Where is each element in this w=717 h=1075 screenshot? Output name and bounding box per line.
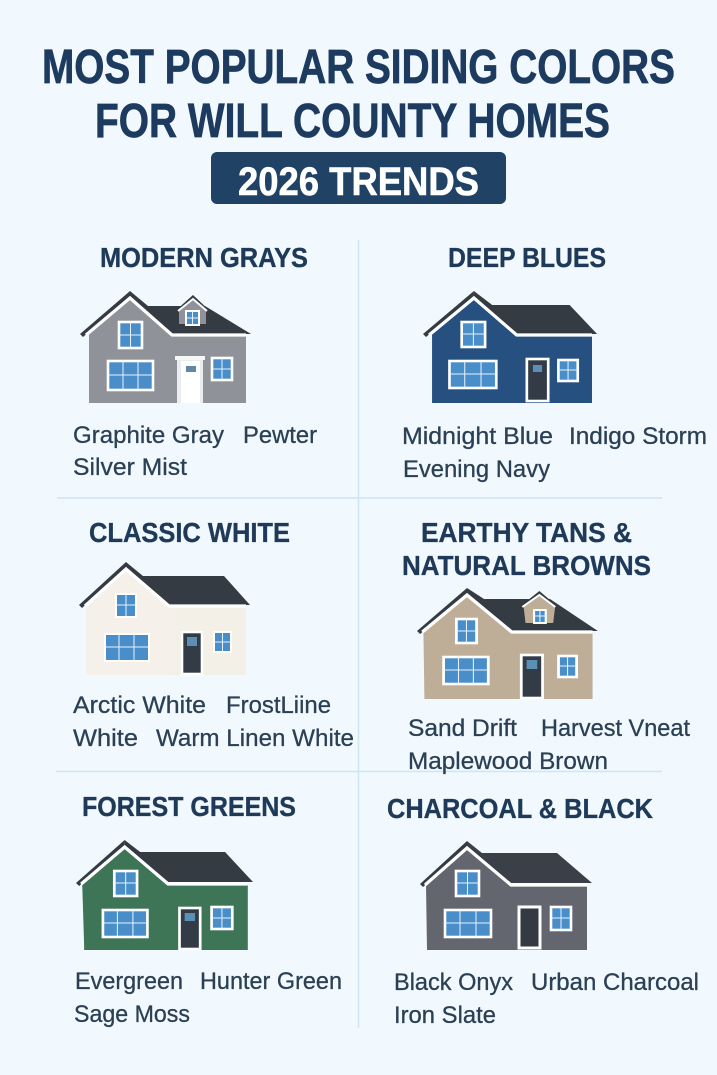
color names: forest greens: Evergreen: [75, 968, 183, 995]
color names: classic white: [73, 692, 354, 752]
panel: classic white: [73, 517, 354, 752]
heading: deep blues: DEEP BLUES: [448, 242, 606, 273]
color names: classic white: Warm Linen White: [156, 725, 354, 752]
color names: deep blues: Midnight Blue: [402, 423, 553, 450]
color names: classic white: White: [73, 725, 138, 752]
panel: charcoal and black: [387, 793, 699, 1029]
title: [42, 41, 675, 148]
color names: deep blues: Indigo Storm: [569, 423, 707, 450]
icon: gray house: [80, 291, 251, 403]
color names: charcoal and black: Urban Charcoal: [531, 969, 699, 996]
icon: blue house: [423, 291, 597, 403]
icon: tan house: [417, 588, 598, 699]
color names: classic white: FrostLiine: [226, 692, 331, 719]
panel: modern grays: [73, 242, 317, 481]
icon: green house: [76, 840, 253, 950]
heading: earthy tans and natural browns: NATURAL BROWNS: [402, 550, 651, 581]
color names: charcoal and black: [394, 969, 699, 1029]
color names: forest greens: Hunter Green: [200, 968, 342, 995]
color names: charcoal and black: Black Onyx: [394, 969, 513, 996]
heading: charcoal and black: CHARCOAL & BLACK: [387, 793, 653, 824]
color names: earthy tans and natural browns: Maplewood Brown: [408, 748, 608, 775]
heading: classic white: CLASSIC WHITE: [89, 517, 290, 548]
color names: forest greens: [74, 968, 342, 1028]
title: FOR WILL COUNTY HOMES: [95, 95, 610, 148]
icon: white house: [79, 562, 250, 675]
color names: modern grays: Pewter: [243, 422, 317, 449]
panel: earthy tans and natural browns: [402, 517, 690, 775]
color names: modern grays: Silver Mist: [73, 454, 187, 481]
heading: modern grays: MODERN GRAYS: [100, 242, 308, 273]
color names: modern grays: [73, 422, 317, 481]
color names: modern grays: Graphite Gray: [73, 422, 225, 449]
heading: earthy tans and natural browns: EARTHY TANS &: [421, 517, 632, 548]
heading: earthy tans and natural browns: [402, 517, 651, 581]
color names: earthy tans and natural browns: Harvest Vneat: [541, 715, 690, 742]
color names: earthy tans and natural browns: Sand Drift: [408, 715, 517, 742]
color names: classic white: Arctic White: [73, 692, 206, 719]
icon: charcoal house: [420, 841, 592, 950]
panel: forest greens: [74, 791, 342, 1028]
badge: 2026 trends: 2026 TRENDS: [238, 160, 479, 204]
panel: deep blues: [402, 242, 707, 483]
color names: deep blues: Evening Navy: [403, 456, 551, 483]
color names: charcoal and black: Iron Slate: [394, 1002, 496, 1029]
color names: forest greens: Sage Moss: [74, 1001, 190, 1028]
heading: forest greens: FOREST GREENS: [82, 791, 296, 822]
color names: earthy tans and natural browns: [408, 715, 690, 775]
color names: deep blues: [402, 423, 707, 483]
